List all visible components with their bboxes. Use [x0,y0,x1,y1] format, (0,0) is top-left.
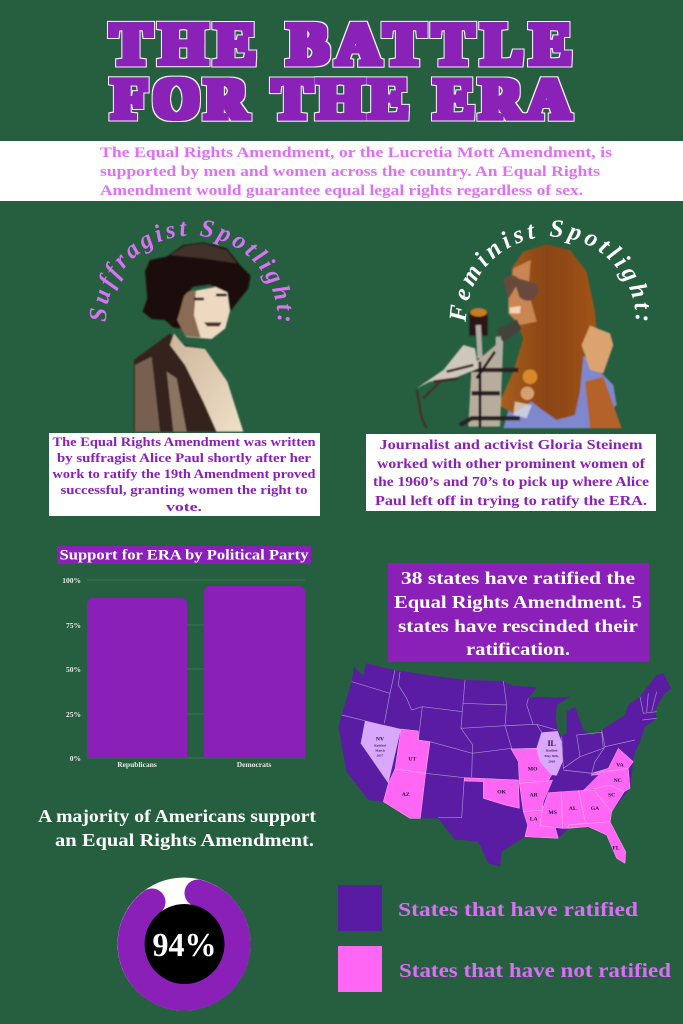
state labels: NV [376,737,385,743]
curved heading: Feminist Spotlight: Feminist Spotlight: [450,220,649,322]
y axis labels [62,576,81,763]
intro band: Amendment would guarantee equal legal rights regardless of sex. [100,183,583,199]
state labels: FL [612,845,620,851]
state labels: MS [548,810,557,816]
legend item: ratified: States that have ratified [398,900,638,921]
x axis labels: Republicans [117,760,157,769]
text box: Alice Paul: work to ratify the 19th Amendment proved [52,466,316,481]
x axis labels: Democrats [237,760,271,769]
y axis labels: 75% [66,621,81,630]
text: majority of Americans [38,806,316,850]
state labels: MO [528,766,538,772]
map: US states: Ratified [546,749,558,753]
map: US states: May 30th, [544,754,559,758]
chart title: Support for ERA by Political Party [60,548,309,564]
donut chart: 94% [118,878,250,1010]
text box: Gloria Steinem: Journalist and activist Gloria Steinem [380,438,643,453]
y axis labels: 50% [66,665,81,674]
legend [338,885,671,992]
title [111,11,571,131]
callout: states ratified: states have rescinded their [398,616,638,636]
state labels: GA [591,806,600,812]
title: THE BATTLE [111,11,571,77]
panel: feminist spotlight [366,220,656,511]
text box: Gloria Steinem [366,434,656,511]
state labels: VA [616,762,625,768]
text box: Gloria Steinem: the 1960’s and 70’s to pick up where Alice [373,475,649,490]
state labels: OK [497,790,507,796]
x axis labels [117,760,271,769]
text box: Alice Paul [49,433,320,516]
map: US states: March [375,749,385,753]
title: FOR THE ERA [112,66,570,131]
bar: Republicans [87,598,187,758]
state labels: AR [530,793,539,799]
legend item: not ratified: States that have not ratified [399,961,671,982]
state labels: UT [408,756,416,762]
callout: states ratified: Equal Rights Amendment. 5 [394,592,642,612]
not ratified states [383,729,633,863]
text box: Alice Paul: by suffragist Alice Paul shortly after her [57,450,311,465]
ratified states [338,663,671,867]
map: US states [338,663,671,867]
intro band [0,141,683,201]
panel: suffragist spotlight [49,220,320,516]
legend item: ratified [338,885,638,931]
intro band: The Equal Rights Amendment, or the Lucretia Mott Amendment, is [100,145,612,161]
bar: Democrats [204,586,305,758]
map: US states: 2018 [548,760,555,764]
map: US states: Ratified [374,744,386,748]
map: US states: 2017 [377,754,384,758]
portrait: Gloria Steinem [417,244,622,428]
state labels [376,737,625,851]
text: majority of Americans: A majority of Americans support [38,806,316,826]
state labels: SC [608,793,615,799]
special states: NV and IL [361,721,563,783]
text box: Alice Paul: The Equal Rights Amendment was written [52,434,316,449]
donut chart: 94%: 94% [152,927,216,964]
text: majority of Americans: an Equal Rights Amendment. [55,830,314,850]
state labels: LA [530,817,539,823]
state labels: NC [614,778,622,784]
text box: Gloria Steinem: worked with other prominent women of [377,457,645,472]
intro band: supported by men and women across the country. An Equal Rights [100,164,600,180]
Tennessee [548,775,598,792]
state labels: AZ [402,792,410,798]
y axis labels: 25% [66,710,81,719]
y axis labels: 0% [70,754,81,763]
state labels: IL [547,739,556,748]
bar chart: support by party [57,546,311,769]
text box: Gloria Steinem: Paul left off in trying to ratify the ERA. [375,494,647,509]
state labels: AL [569,806,577,812]
portrait: Alice Paul [134,242,251,432]
text box: Alice Paul: successful, granting women the right to [60,482,308,497]
curved heading: Suffragist Spotlight: Suffragist Spotlight: [90,220,292,322]
text box: Alice Paul: vote. [166,499,202,514]
callout: states ratified: ratification. [466,639,570,659]
legend item: not ratified [338,946,671,992]
callout: states ratified: 38 states have ratified the [401,568,635,588]
callout: states ratified [388,563,649,662]
y axis labels: 100% [62,576,81,585]
